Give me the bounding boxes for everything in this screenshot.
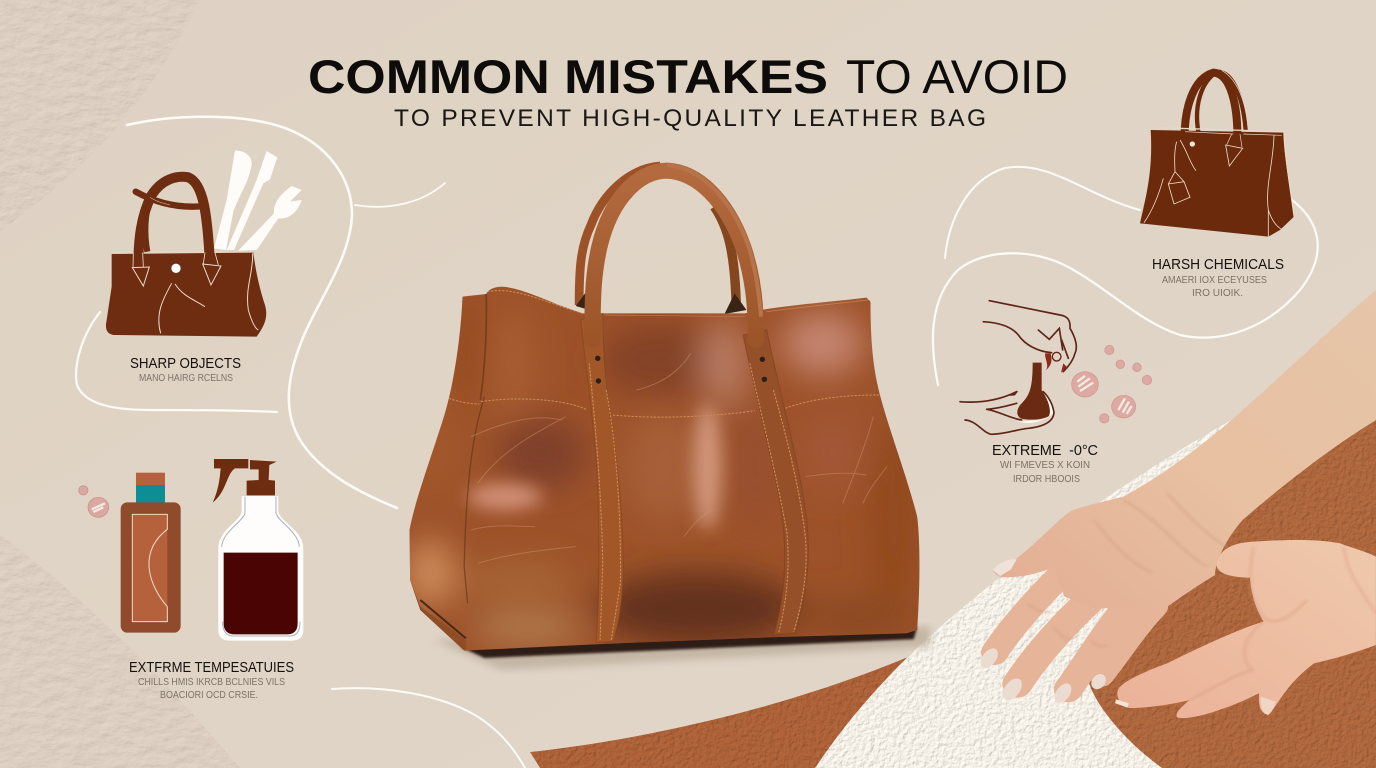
leather swatch: right brown (1088, 420, 1376, 768)
leather swatch: bottom brown (530, 657, 908, 768)
stitching (449, 291, 880, 417)
bag body (400, 283, 930, 657)
icon: sharp objects with handbag (106, 151, 302, 337)
title: TO PREVENT HIGH-QUALITY LEATHER BAG (394, 105, 986, 132)
leather swatch: white (815, 418, 1240, 768)
main leather tote bag (400, 165, 930, 670)
label: sharp objects: SHARP OBJECTS (130, 356, 241, 372)
label: extreme cold: IRDOR HBOOIS (1013, 474, 1080, 485)
right strap (743, 330, 808, 635)
icon: hand pouring flask (960, 301, 1152, 434)
label: extreme temperatures: BOACIORI OCD CRSIE. (160, 690, 258, 701)
white connector curves (76, 117, 1318, 768)
label: extreme temperatures (129, 660, 294, 701)
scratch marks (471, 353, 887, 563)
label: harsh chemicals: IRO UIOIK. (1192, 288, 1243, 299)
label: sharp objects (130, 356, 241, 384)
label: sharp objects: MANO HAIRG RCELNS (139, 373, 233, 384)
icon: bottles (79, 459, 303, 641)
label: extreme temperatures: CHILLS HMIS IKRCB BCLNIES VILS (138, 677, 285, 688)
icon: droplets (79, 486, 109, 517)
icon: bubbles (1072, 345, 1152, 423)
label: harsh chemicals: HARSH CHEMICALS (1152, 257, 1284, 273)
label: harsh chemicals: AMAERI IOX ECEYUSES (1162, 275, 1267, 286)
front handle (592, 165, 761, 340)
right back flap (767, 298, 824, 307)
label: extreme temperatures: EXTFRME TEMPESATUIES (129, 660, 294, 676)
label: extreme cold (992, 443, 1098, 485)
icon: spray bottle (213, 459, 303, 641)
back handle (576, 166, 746, 314)
side seam (464, 397, 484, 603)
title: COMMON MISTAKES (308, 50, 828, 103)
label: harsh chemicals (1152, 257, 1284, 299)
leather swatch: top left (0, 0, 200, 232)
label: extreme cold: WI FMEVES X KOIN (1000, 460, 1090, 471)
bottom edge (410, 580, 466, 652)
fingers (995, 573, 1156, 689)
title (308, 50, 1068, 132)
fingernails (977, 559, 1109, 706)
right hand and arm (977, 290, 1376, 706)
label: extreme cold: EXTREME -0°C (992, 443, 1098, 459)
left strap (581, 313, 623, 643)
icon: structured handbag (1140, 70, 1294, 237)
title: TO AVOID (846, 50, 1068, 103)
left hand, palm up (1115, 540, 1376, 718)
hands on leather (977, 290, 1376, 718)
bag ground shadow (434, 627, 930, 670)
leather swatch: bottom left (0, 535, 240, 768)
